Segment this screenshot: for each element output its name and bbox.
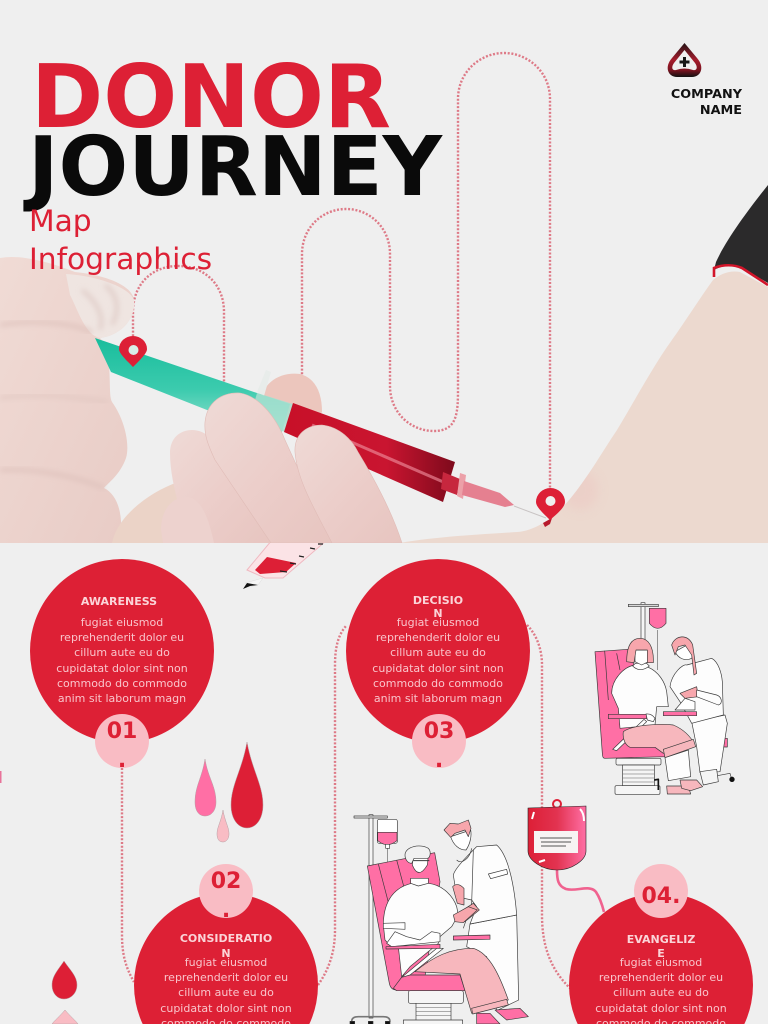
text block: [595, 956, 727, 1024]
text block: fugiat eiusmod: [397, 616, 479, 629]
text block: cupidatat dolor sint non: [160, 1002, 292, 1015]
text block: [160, 956, 292, 1024]
text block: cillum aute eu do: [613, 986, 709, 999]
number badge: 02: [211, 869, 241, 894]
nurse: [670, 637, 727, 785]
text block: fugiat eiusmod: [81, 616, 163, 629]
iv bag: [377, 819, 397, 947]
number badge: [412, 714, 466, 773]
number badge: .: [435, 748, 443, 773]
heading: N: [433, 607, 443, 620]
panel: evangelize: [569, 864, 753, 1024]
number badge: 03: [424, 719, 454, 744]
syringe: [95, 338, 552, 527]
text block: reprehenderit dolor eu: [599, 971, 723, 984]
icon: map pin start: [119, 336, 147, 367]
illustration: nurse with seated patient: [595, 603, 735, 794]
text block: fugiat eiusmod: [620, 956, 702, 969]
text block: reprehenderit dolor eu: [60, 631, 184, 644]
subtitle: Infographics: [29, 242, 212, 277]
number badge: [634, 864, 688, 918]
icon: pink fragment at left edge: [0, 771, 2, 783]
text block: anim sit laborum magn: [58, 692, 186, 705]
iv pole: [350, 815, 390, 1024]
heading: [180, 932, 272, 960]
number badge: [95, 714, 149, 773]
chair: [595, 649, 735, 794]
subtitle: Map: [29, 204, 92, 239]
panel: awareness: [30, 559, 214, 773]
third finger: [213, 542, 214, 543]
text block: [372, 616, 504, 705]
text block: cillum aute eu do: [390, 646, 486, 659]
dotted connector lines: [122, 625, 572, 990]
heading: EVANGELIZ: [627, 933, 695, 946]
chair: [367, 853, 465, 1024]
heading: CONSIDERATIO: [180, 932, 272, 945]
iv stand: [628, 603, 666, 670]
title: JOURNEY: [23, 120, 444, 215]
panel: consideration: [134, 864, 318, 1024]
text block: commodo do commodo: [57, 677, 187, 690]
wrist behind fingers: [120, 484, 177, 543]
number badge: .: [118, 748, 126, 773]
left hand glove: [0, 257, 134, 543]
logo: company name: COMPANY: [671, 87, 743, 102]
text block: cupidatat dolor sint non: [595, 1002, 727, 1015]
heading: [413, 594, 463, 620]
index finger: [205, 393, 332, 543]
logo: company name: NAME: [700, 103, 742, 118]
heading: N: [221, 947, 231, 960]
doctor: [444, 820, 528, 1020]
text block: reprehenderit dolor eu: [376, 631, 500, 644]
text block: reprehenderit dolor eu: [164, 971, 288, 984]
text block: cupidatat dolor sint non: [372, 662, 504, 675]
seated patient: [608, 638, 703, 794]
seated man: [383, 846, 508, 1024]
text block: cupidatat dolor sint non: [56, 662, 188, 675]
logo: company name: [668, 43, 743, 118]
right finger: [295, 425, 402, 543]
arm: [400, 185, 768, 543]
icon: blood bag: [528, 800, 604, 912]
heading: [627, 933, 695, 960]
text block: commodo do commodo: [373, 677, 503, 690]
heading: AWARENESS: [81, 595, 157, 608]
text block: [56, 616, 188, 705]
number badge: 04.: [642, 884, 680, 909]
text block: cillum aute eu do: [74, 646, 170, 659]
far finger behind syringe: [264, 374, 322, 413]
icon: map pin end: [536, 488, 565, 520]
heading: DECISIO: [413, 594, 463, 607]
icon: blood drop logo: [668, 43, 701, 77]
icon: syringe fragment: [243, 540, 327, 589]
icon: blood drops: [52, 742, 263, 1024]
text block: fugiat eiusmod: [185, 956, 267, 969]
text block: cillum aute eu do: [178, 986, 274, 999]
text block: anim sit laborum magn: [374, 692, 502, 705]
number badge: 01: [107, 719, 137, 744]
panel: decision: [346, 559, 530, 773]
heading: E: [657, 947, 665, 960]
photo: hands, syringe and arm: [0, 185, 768, 543]
illustration: doctor with seated man: [350, 815, 528, 1024]
number badge: .: [222, 898, 230, 923]
second finger: [170, 430, 272, 543]
title: [23, 46, 444, 215]
dotted journey path: [133, 53, 550, 488]
title: DONOR: [31, 46, 391, 148]
number badge: [199, 864, 253, 923]
subtitle: [29, 204, 212, 277]
